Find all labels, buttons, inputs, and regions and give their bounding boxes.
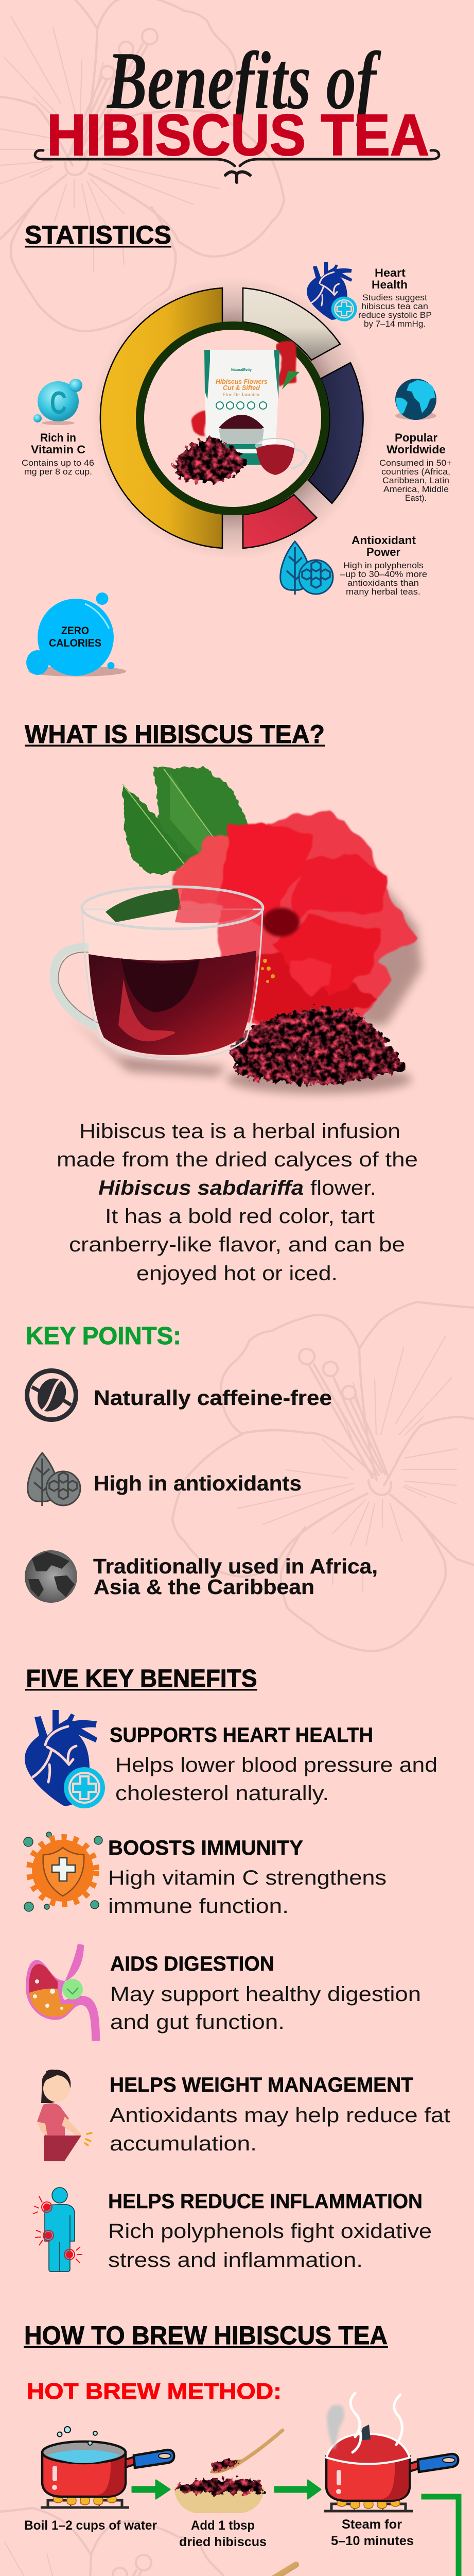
hibiscus flower — [175, 812, 416, 1025]
product pouch with tea: Hibiscus Flowers — [216, 378, 268, 385]
background flower: top — [0, 0, 284, 331]
stat: popular worldwide: Caribbean, Latin — [382, 476, 449, 485]
hot step 3: steam: 5–10 minutes — [331, 2534, 414, 2548]
intro paragraph — [57, 1120, 418, 1285]
segment: vitamin C gold — [100, 288, 222, 548]
section heading: how to brew: HOW TO BREW HIBISCUS TEA — [24, 2321, 388, 2350]
stat: popular worldwide: Worldwide — [387, 443, 446, 456]
intro paragraph: cranberry-like flavor, and can be — [69, 1233, 405, 1256]
intro paragraph: flower. — [310, 1177, 376, 1199]
benefit: digestion: AIDS DIGESTION — [110, 1953, 274, 1975]
benefit: inflammation: stress and inflammation. — [108, 2249, 363, 2272]
icon: body with inflamed joints — [33, 2188, 82, 2272]
benefit: inflammation: HELPS REDUCE INFLAMMATION — [108, 2190, 423, 2213]
key point: antioxidants — [28, 1453, 302, 1506]
hot step 3: steam — [324, 2393, 458, 2548]
popular worldwide heading: Popular — [395, 431, 437, 444]
hot step 5: sweeten with honey — [157, 2565, 296, 2576]
icon: blue globe — [395, 379, 436, 420]
section heading: five key benefits: FIVE KEY BENEFITS — [26, 1665, 257, 1692]
icon: woman with loose pants — [37, 2070, 92, 2161]
soft drop shadows — [67, 850, 422, 1094]
background flower: brewing — [0, 2508, 278, 2576]
leaf: left — [122, 784, 201, 874]
vitamin C heading: Rich in — [40, 431, 76, 444]
stat: antioxidant power: Power — [366, 546, 400, 558]
photo: honey dipper over tea cup with flower — [157, 2565, 296, 2576]
stat: heart health: Health — [372, 278, 408, 291]
intro paragraph: It has a bold red color, tart — [105, 1205, 375, 1228]
benefit: weight management: HELPS WEIGHT MANAGEMENT — [110, 2074, 413, 2096]
stat: popular worldwide: America, Middle — [383, 484, 449, 494]
icon: heart with cross — [25, 1710, 105, 1808]
vitamin C text: Contains up to 46 — [22, 458, 94, 468]
photo: bowl and spoon of hibiscus — [174, 2430, 283, 2513]
benefit: weight management — [37, 2070, 450, 2161]
hot step 2: add dried hibiscus: dried hibiscus — [179, 2535, 267, 2549]
badge: zero calories: ZERO — [61, 625, 89, 637]
benefit: heart health — [25, 1710, 437, 1808]
benefit: immunity — [24, 1832, 387, 1918]
product pouch with tea — [175, 340, 306, 482]
intro paragraph: Hibiscus sabdariffa — [98, 1177, 304, 1199]
product pouch with tea: NaturalEvity — [231, 368, 252, 372]
icon: leaf and molecule — [280, 541, 333, 595]
key point: caffeine-free — [27, 1370, 332, 1420]
icon: grey leaf and molecule — [28, 1453, 80, 1506]
stat: vitamin C: mg per 8 oz cup. — [24, 467, 92, 477]
product pouch with tea: Cut & Sifted — [223, 384, 260, 392]
intro paragraph: Hibiscus tea is a herbal infusion — [79, 1120, 400, 1143]
benefit: immunity: High vitamin C strengthens — [108, 1867, 387, 1889]
arrow: hot step 1 to 2 — [132, 2480, 170, 2499]
arrow: hot step 2 to 3 — [275, 2480, 321, 2499]
stat: popular worldwide — [379, 379, 452, 503]
segment: popular worldwide navy — [308, 363, 363, 503]
key point: caffeine-free: Naturally caffeine-free — [94, 1386, 332, 1410]
icon: no caffeine — [27, 1370, 76, 1420]
icon: stomach — [26, 1944, 100, 2041]
key point: traditional use: Traditionally used in Africa, — [93, 1554, 378, 1578]
icon: immune shield — [24, 1832, 102, 1911]
title flourish — [35, 150, 439, 182]
stat: antioxidant power: –up to 30–40% more — [340, 569, 427, 579]
key point: traditional use: Asia & the Caribbean — [94, 1575, 314, 1599]
badge: zero calories: CALORIES — [49, 637, 101, 649]
title — [35, 35, 439, 182]
hot step 1: boil water: Boil 1–2 cups of water — [24, 2518, 157, 2533]
section heading: what is hibiscus tea: WHAT IS HIBISCUS TEA? — [25, 720, 325, 749]
segment: heart health cream — [243, 288, 340, 360]
intro paragraph: made from the dried calyces of the — [57, 1148, 418, 1171]
section heading: statistics: STATISTICS — [25, 221, 171, 249]
icon: covered steaming pot — [324, 2393, 458, 2511]
benefit: inflammation: Rich polyphenols fight oxidative — [108, 2220, 432, 2243]
leaf: large — [153, 767, 252, 855]
benefit: heart health: SUPPORTS HEART HEALTH — [110, 1724, 373, 1747]
product pouch with tea: Flor De Jamaica — [222, 392, 259, 397]
stat: vitamin C: Vitamin C — [31, 443, 85, 456]
stat: heart health — [307, 262, 432, 329]
key point: antioxidants: High in antioxidants — [94, 1471, 302, 1495]
key point: traditional use — [25, 1550, 378, 1603]
background flower: key points — [172, 1302, 474, 1651]
stat: popular worldwide: countries (Africa, — [381, 467, 450, 477]
benefit: immunity: BOOSTS IMMUNITY — [108, 1837, 303, 1859]
donut inner ring — [140, 326, 325, 511]
stat: heart health: reduce systolic BP — [358, 310, 432, 320]
stat: heart health: by 7–14 mmHg. — [364, 319, 426, 329]
icon: vitamin C bubbles: C — [50, 385, 67, 421]
benefit: digestion: May support healthy digestion — [110, 1983, 421, 2006]
benefit: heart health: Helps lower blood pressure and — [115, 1754, 437, 1776]
popular worldwide text: Consumed in 50+ — [379, 458, 452, 468]
intro paragraph: enjoyed hot or iced. — [136, 1262, 338, 1285]
benefit: inflammation — [33, 2188, 432, 2272]
title red line: HIBISCUS TEA — [47, 103, 429, 167]
benefit: heart health: cholesterol naturally. — [115, 1782, 329, 1805]
stat: popular worldwide: East). — [405, 493, 427, 503]
benefit: digestion: and gut function. — [110, 2011, 285, 2033]
donut shadow — [91, 276, 374, 560]
heading: hot brew method: HOT BREW METHOD: — [27, 2379, 282, 2404]
tea cup — [54, 887, 263, 1059]
stat: heart health: hibiscus tea can — [361, 301, 428, 311]
hero photo: hibiscus tea cup, flower, leaves — [54, 767, 422, 1094]
badge: zero calories — [26, 592, 126, 676]
icon: heart — [307, 262, 357, 321]
hot step 2: add dried hibiscus: Add 1 tbsp — [191, 2518, 255, 2533]
segment: antioxidant red — [243, 495, 317, 548]
benefit: immunity: immune function. — [108, 1895, 289, 1918]
icon: vitamin C bubbles — [33, 379, 82, 425]
stat: vitamin C — [22, 379, 94, 477]
heading: key points: KEY POINTS: — [26, 1323, 181, 1350]
arrow: hot step 3 to 4 — [422, 2494, 461, 2576]
heart health text: Studies suggest — [362, 293, 427, 302]
statistics donut chart — [91, 276, 374, 560]
stat: antioxidant power — [280, 534, 427, 597]
heart health heading: Heart — [375, 266, 406, 279]
icon: grey globe — [25, 1550, 77, 1603]
benefit: weight management: Antioxidants may help reduce fat — [110, 2104, 450, 2127]
hot step 2: add dried hibiscus — [174, 2430, 283, 2549]
benefit: weight management: accumulation. — [110, 2132, 257, 2155]
dried hibiscus pile — [229, 1007, 407, 1084]
benefit: digestion — [26, 1944, 421, 2041]
antioxidant heading: Antioxidant — [352, 534, 416, 547]
hot step 3: steam: Steam for — [342, 2517, 402, 2532]
dried hibiscus pile — [175, 438, 246, 482]
stat: antioxidant power: many herbal teas. — [346, 587, 420, 597]
hot step 1: boil water — [24, 2427, 174, 2533]
title script line: Benefits of — [107, 35, 381, 126]
antioxidant text: High in polyphenols — [343, 561, 424, 570]
stat: antioxidant power: antioxidants than — [347, 578, 419, 588]
icon: pot of boiling water — [41, 2427, 174, 2507]
small tea cup — [256, 438, 295, 453]
